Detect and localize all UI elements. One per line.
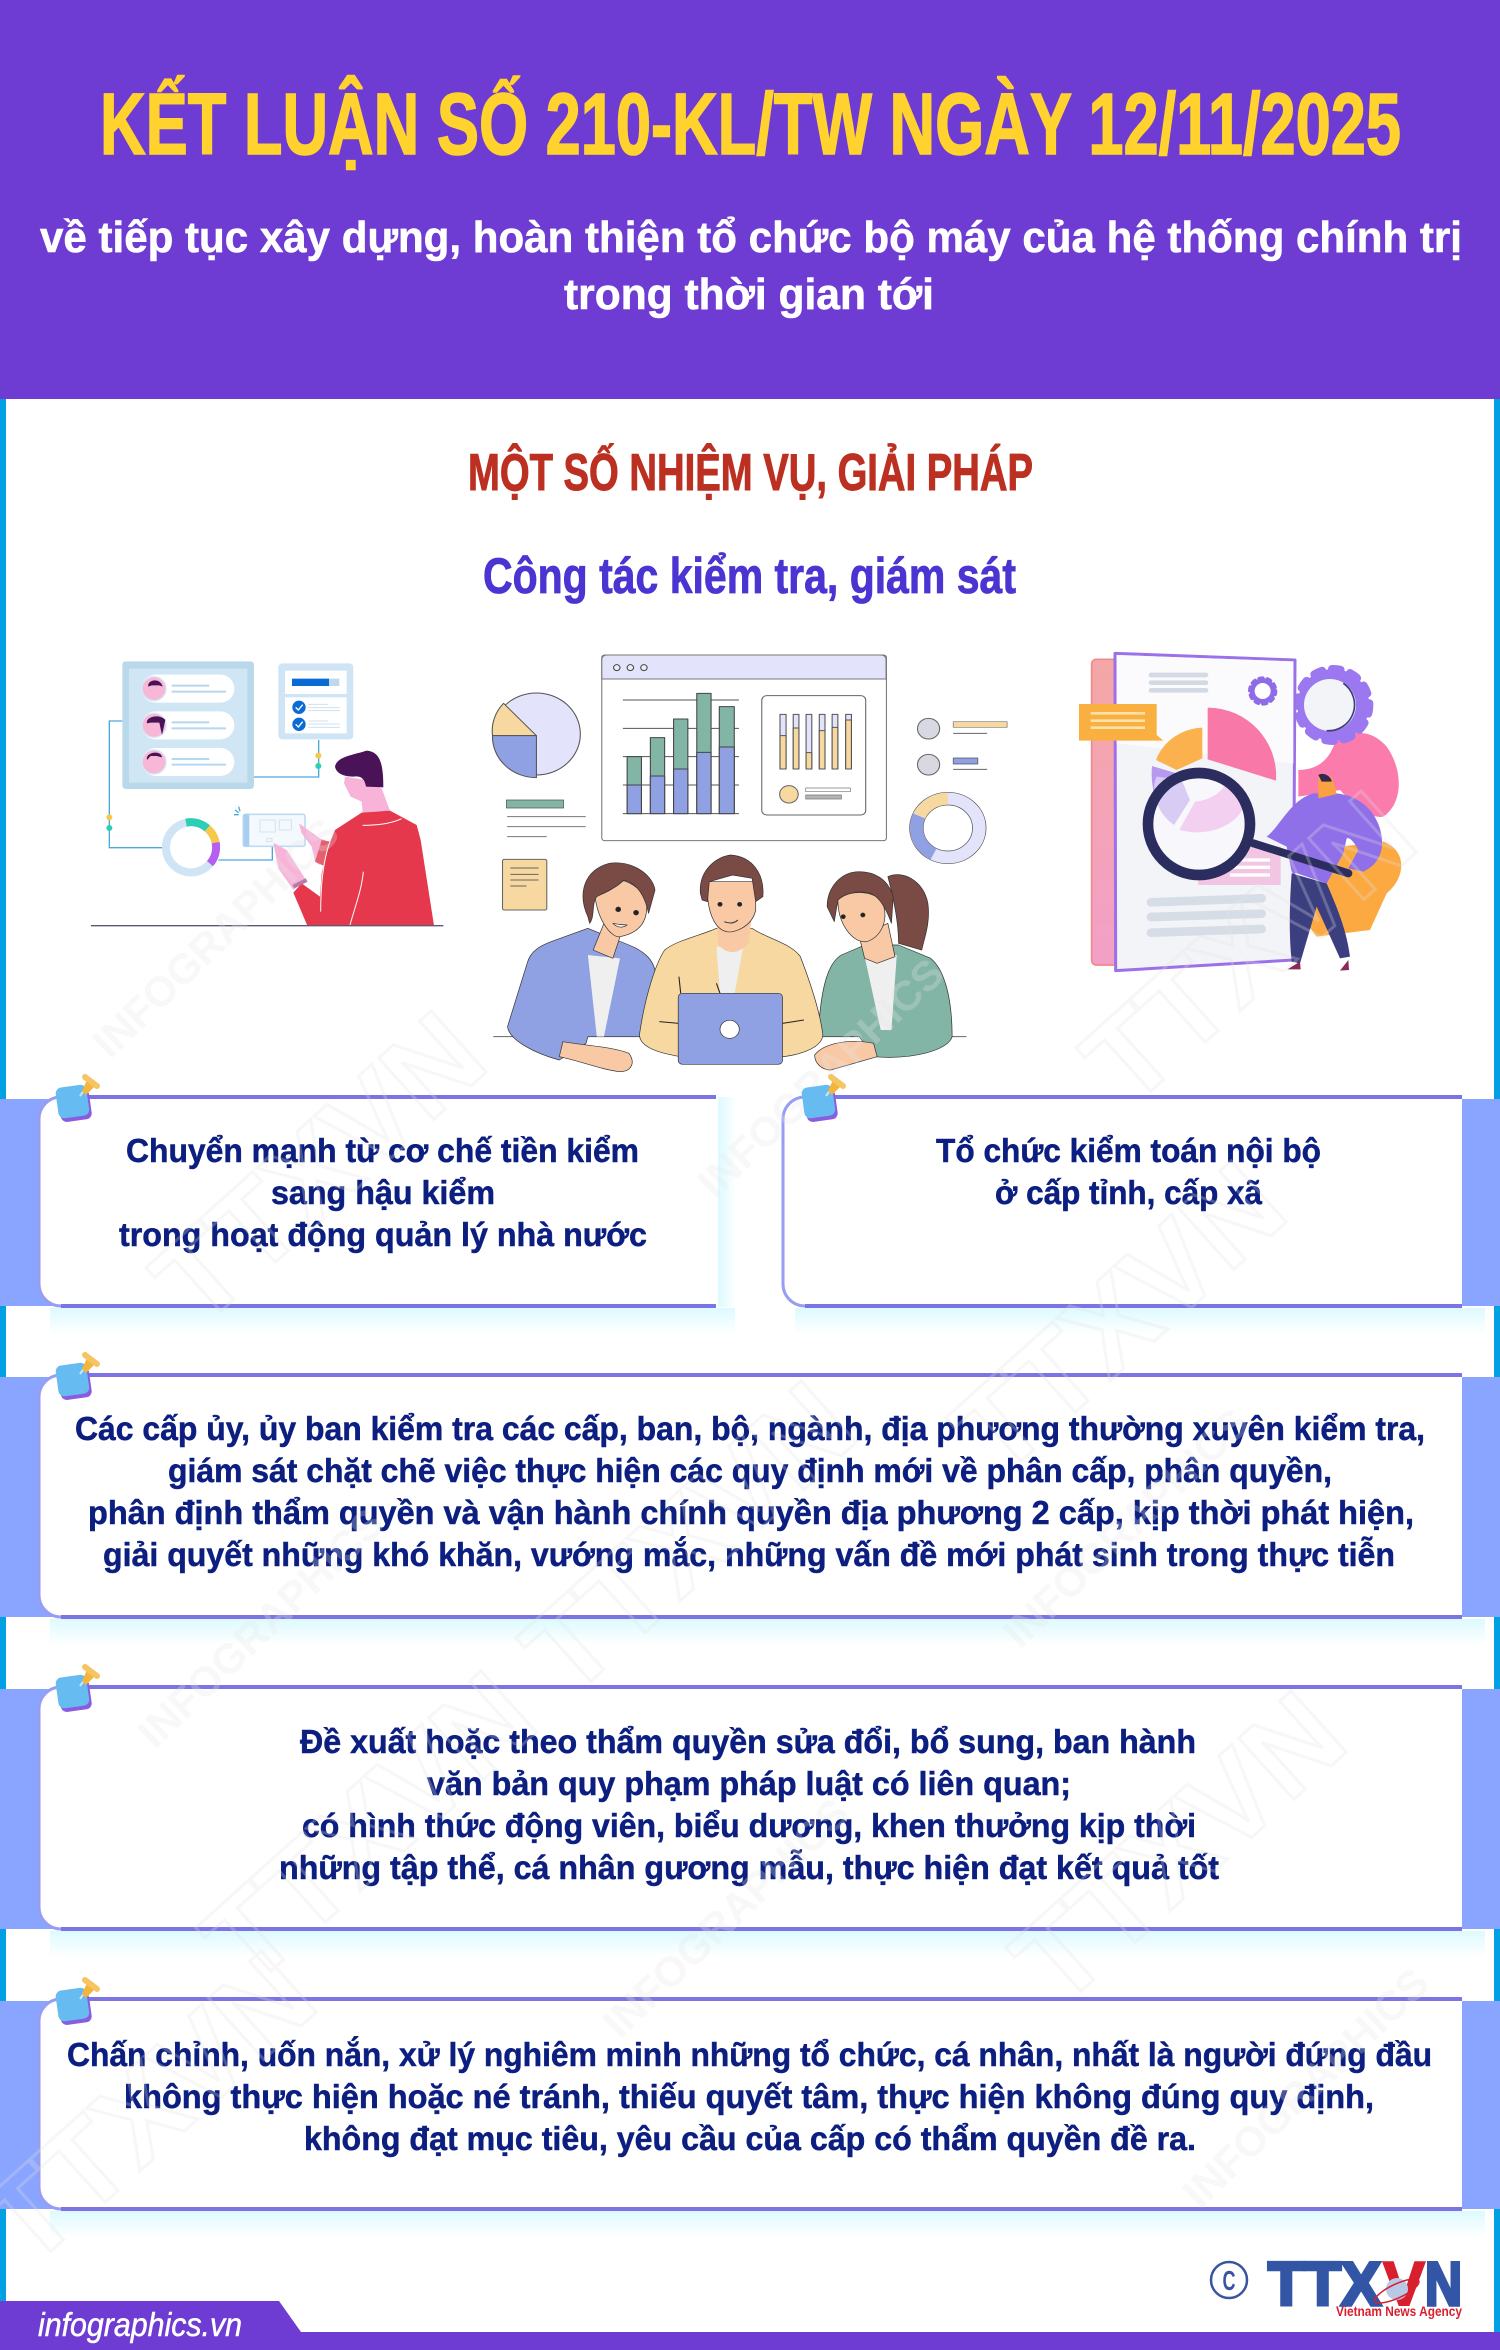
card 2: ở cấp tỉnh, cấp xã	[995, 1174, 1263, 1211]
watermarks: INFOGRAPHICS	[689, 949, 953, 1206]
TTXVN logo: TTX	[1268, 2250, 1381, 2318]
card 1: Chuyển mạnh từ cơ chế tiền kiểm	[126, 1132, 639, 1169]
right cyan side border	[1494, 399, 1500, 2339]
card 5: không thực hiện hoặc né tránh, thiếu quyết tâm, thực hiện không đúng quy định,	[124, 2078, 1374, 2115]
watermarks: TTXVN	[988, 1667, 1370, 2029]
TTXVN logo: Vietnam News Agency	[1336, 2304, 1462, 2319]
card 4: Đề xuất hoặc theo thẩm quyền sửa đổi, bổ sung, ban hành	[300, 1723, 1196, 1760]
card 5: Chấn chỉnh, uốn nắn, xử lý nghiêm minh những tổ chức, cá nhân, nhất là người đứng đầu	[67, 2036, 1432, 2073]
footer band	[0, 2301, 1500, 2350]
person right	[815, 872, 952, 1070]
card 2: Tổ chức kiểm toán nội bộ	[936, 1132, 1321, 1169]
card 4	[0, 1687, 1500, 1929]
card 3: phân định thẩm quyền và vận hành chính quyền địa phương 2 cấp, kịp thời phát hiện,	[88, 1494, 1414, 1531]
sticky note	[502, 859, 547, 910]
subtitle: về tiếp tục xây dựng, hoàn thiện tổ chức bộ máy của hệ thống chính trị	[40, 213, 1462, 262]
watermarks: INFOGRAPHICS	[1174, 1959, 1438, 2216]
left legend	[506, 800, 586, 837]
subtitle	[40, 213, 1462, 319]
section subheading: Công tác kiểm tra, giám sát	[483, 548, 1016, 604]
browser window with bar charts	[602, 655, 886, 841]
right legend	[917, 718, 1007, 775]
copyright icon: C	[1222, 2265, 1236, 2296]
watermarks: INFOGRAPHICS	[129, 1499, 393, 1756]
card 5	[0, 1999, 1500, 2209]
card 4: văn bản quy phạm pháp luật có liên quan;	[427, 1765, 1071, 1802]
left cyan side border	[0, 399, 6, 2309]
card 2	[783, 1097, 1500, 1306]
watermarks: TTXVN	[178, 1647, 560, 2009]
card 4: có hình thức động viên, biểu dương, khen thưởng kịp thời	[302, 1807, 1196, 1844]
person center with laptop	[640, 855, 823, 1064]
watermarks: TTXVN	[128, 987, 510, 1349]
header band	[0, 0, 1500, 399]
pin icons	[55, 1077, 843, 2026]
TTXVN logo: V	[1383, 2250, 1425, 2319]
watermarks: INFOGRAPHICS	[84, 809, 348, 1066]
watermarks: TTXVN	[928, 1137, 1310, 1499]
TTXVN logo	[1268, 2250, 1462, 2319]
copyright icon	[1211, 2262, 1247, 2298]
watermarks: INFOGRAPHICS	[994, 1399, 1258, 1656]
card 1: sang hậu kiểm	[271, 1174, 495, 1211]
illustration: man with magnifier and report	[1079, 653, 1401, 971]
section heading: MỘT SỐ NHIỆM VỤ, GIẢI PHÁP	[468, 443, 1033, 502]
glow under cards	[50, 1097, 1485, 2237]
card 1: trong hoạt động quản lý nhà nước	[119, 1216, 647, 1253]
watermarks: TTXVN	[1058, 767, 1440, 1129]
person left	[507, 863, 656, 1072]
watermarks: TTXVN	[498, 1357, 880, 1719]
illustration: team at laptop with charts	[492, 655, 1007, 1072]
pie chart	[492, 693, 580, 778]
card 1	[0, 1097, 716, 1306]
card 5: không đạt mục tiêu, yêu cầu của cấp có thẩm quyền đề ra.	[304, 2120, 1196, 2157]
card 4: những tập thể, cá nhân gương mẫu, thực hiện đạt kết quả tốt	[279, 1849, 1219, 1886]
donut chart	[916, 799, 979, 857]
card 3: giám sát chặt chẽ việc thực hiện các quy định mới về phân cấp, phân quyền,	[168, 1452, 1332, 1489]
illustration: man with tablet and dashboards	[91, 661, 443, 926]
footer site label: infographics.vn	[38, 2306, 242, 2343]
watermarks	[0, 767, 1440, 2289]
card 3: Các cấp ủy, ủy ban kiểm tra các cấp, ban, bộ, ngành, địa phương thường xuyên kiểm tra,	[75, 1410, 1425, 1447]
card 3	[0, 1375, 1500, 1617]
TTXVN logo: N	[1425, 2250, 1462, 2318]
card 3: giải quyết những khó khăn, vướng mắc, những vấn đề mới phát sinh trong thực tiễn	[103, 1536, 1395, 1573]
subtitle: trong thời gian tới	[564, 270, 934, 319]
watermarks: INFOGRAPHICS	[594, 1789, 858, 2046]
